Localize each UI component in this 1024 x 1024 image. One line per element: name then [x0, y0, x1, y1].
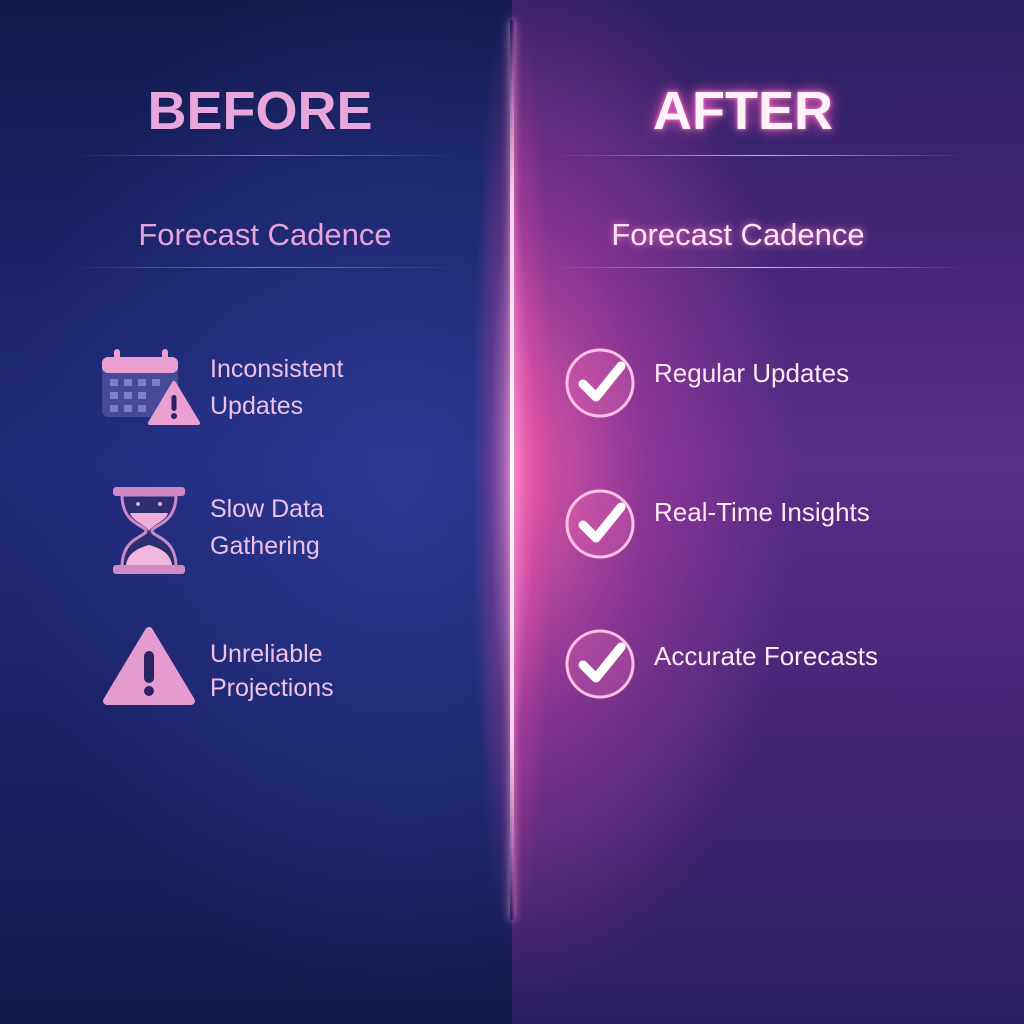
text: Real-Time Insights	[654, 497, 870, 527]
icon: check circle	[566, 490, 634, 558]
subtitle: before: Forecast Cadence	[138, 217, 392, 252]
icon: hourglass	[113, 487, 185, 574]
item: regular updates	[566, 348, 849, 418]
title: before: BEFORE	[147, 81, 373, 141]
text: Gathering	[210, 532, 320, 560]
subtitle: after: Forecast Cadence	[611, 217, 865, 252]
text: Regular Updates	[654, 358, 849, 388]
text: Accurate Forecasts	[654, 641, 878, 671]
icon: calendar warning	[102, 349, 200, 425]
item: real-time insights	[566, 490, 870, 558]
text	[210, 355, 344, 420]
icon: warning triangle	[103, 627, 195, 705]
text: Inconsistent	[210, 355, 343, 383]
title: after: AFTER	[653, 81, 833, 141]
icon: check circle	[566, 630, 634, 698]
item: accurate forecasts	[566, 630, 878, 698]
text	[210, 640, 334, 702]
text: Unreliable	[210, 640, 323, 668]
text	[210, 495, 324, 560]
text: Projections	[210, 674, 334, 702]
center glowing divider	[472, 0, 552, 1024]
item: inconsistent updates	[102, 349, 344, 425]
item: slow data gathering	[113, 487, 324, 574]
text: Slow Data	[210, 495, 324, 523]
item: unreliable projections	[103, 627, 334, 705]
icon: check circle	[566, 348, 634, 418]
text: Updates	[210, 392, 303, 420]
